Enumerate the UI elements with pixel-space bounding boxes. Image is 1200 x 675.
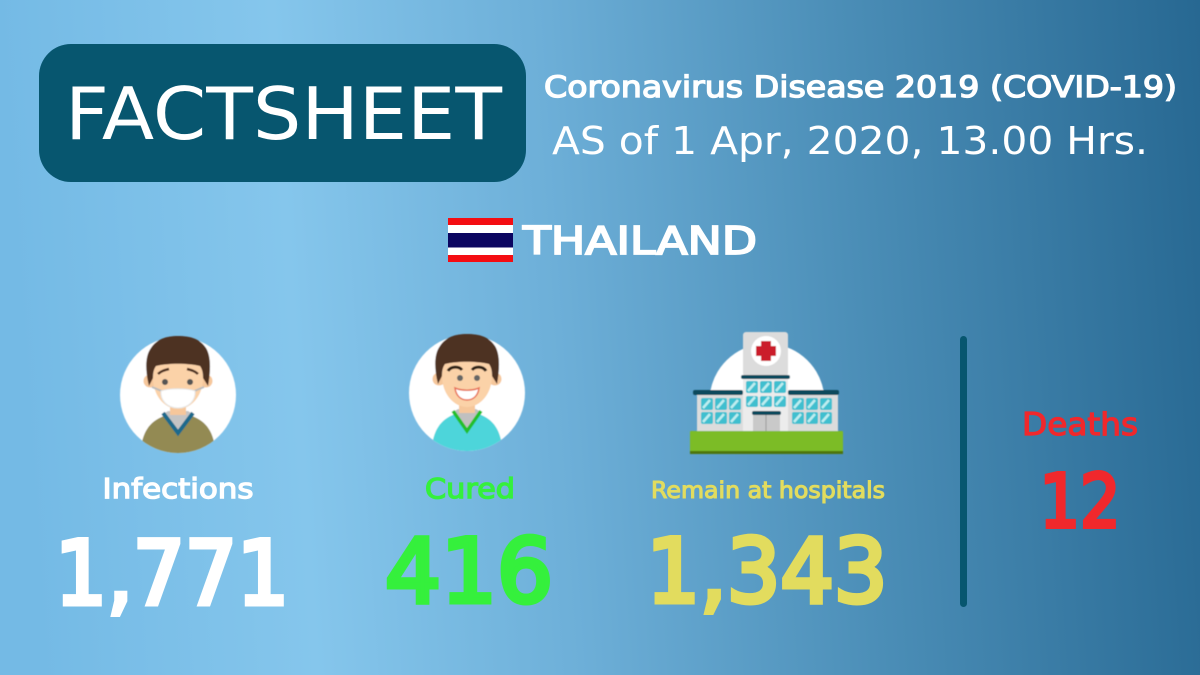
icon: hospital — [690, 332, 843, 454]
icon: smiling person — [409, 334, 525, 456]
label: Remain at hospitals: Remain at hospitals — [651, 478, 885, 504]
date line: AS of 1 Apr, 2020, 13.00 Hrs. — [552, 119, 1148, 163]
value: infections: 1,771 — [55, 522, 289, 625]
value: remain at hospitals: 1,343 — [646, 520, 888, 623]
title badge: FACTSHEET — [39, 44, 526, 182]
icon: masked person — [120, 336, 236, 458]
title badge: FACTSHEET: FACTSHEET — [65, 72, 503, 156]
label: Cured: Cured — [425, 472, 515, 505]
label: Infections: Infections — [102, 472, 254, 505]
label: Deaths: Deaths — [1022, 407, 1138, 443]
icon: Thai flag — [448, 218, 513, 262]
value: deaths: 12 — [1040, 459, 1120, 545]
value: cured: 416 — [385, 520, 553, 623]
heading: disease name: Coronavirus Disease 2019 (COVID-19) — [544, 70, 1177, 104]
divider — [960, 336, 967, 607]
country name: THAILAND — [522, 219, 757, 263]
